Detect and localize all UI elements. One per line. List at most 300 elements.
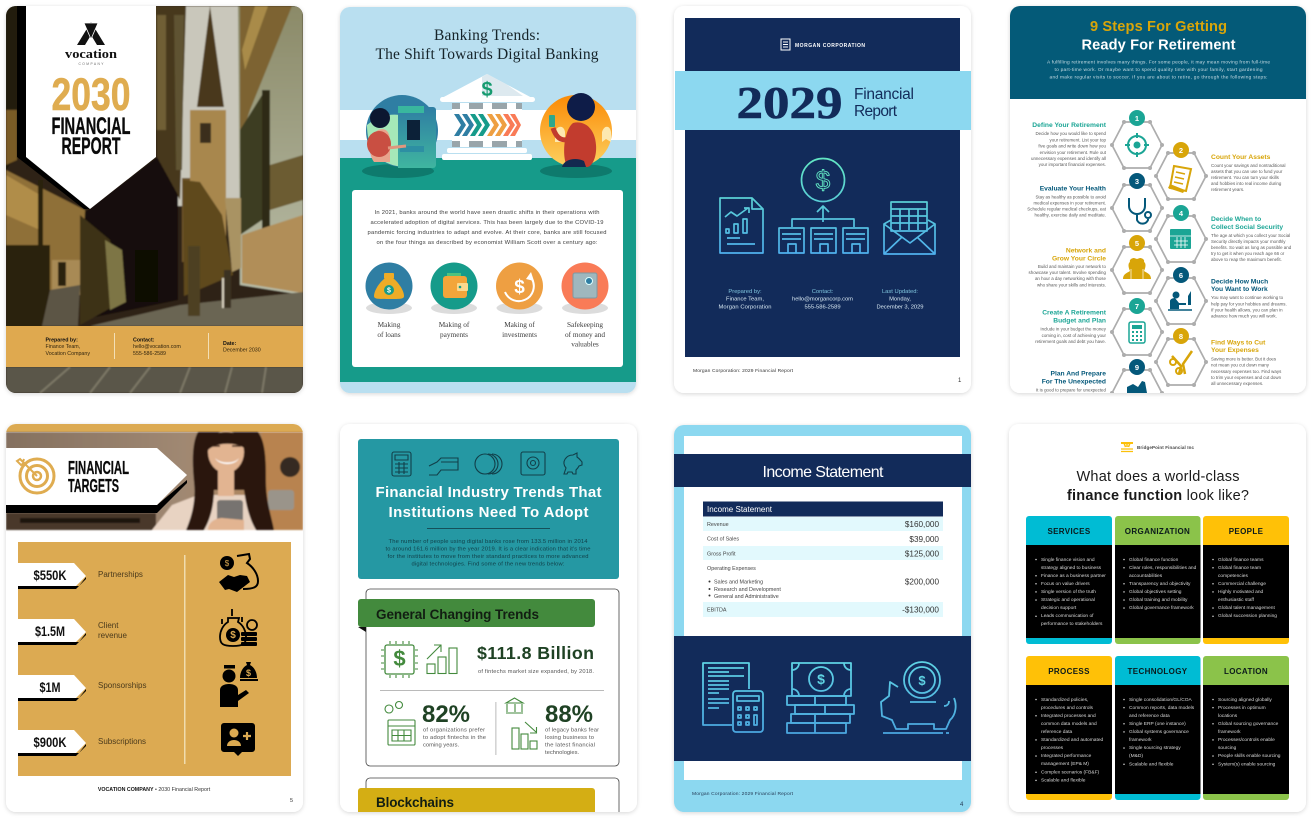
table: income statement: EBITDA bbox=[707, 608, 727, 614]
step 7 text: Include in your budget the money bbox=[1040, 326, 1107, 332]
target row: subscriptions bbox=[18, 730, 146, 756]
step 8 text: Your Expenses bbox=[1211, 347, 1259, 354]
report details: 555-586-2589 bbox=[804, 304, 841, 310]
number badges: 3 bbox=[1135, 177, 1139, 186]
year 2030: 2030 bbox=[52, 69, 130, 120]
step 6 text: You Want to Work bbox=[1211, 286, 1268, 293]
stat: 88% bbox=[545, 701, 599, 756]
hexagon chain bbox=[1112, 122, 1206, 416]
icon: money bag, making of loans bbox=[366, 262, 412, 314]
step icons bbox=[1123, 133, 1192, 393]
target row: sponsorships: $1M bbox=[40, 679, 60, 695]
target row: client revenue bbox=[18, 619, 127, 645]
band: title 2029 financial report bbox=[675, 71, 971, 130]
labels: four things banks do: of money and bbox=[565, 330, 605, 339]
title: What does a world-class bbox=[1076, 469, 1240, 485]
black ribbon shadow bbox=[17, 6, 90, 209]
step 2 text: Count your savings and nontraditional bbox=[1211, 163, 1286, 168]
number badges bbox=[1129, 110, 1189, 375]
step 6 text bbox=[1211, 278, 1287, 318]
table: income statement: $160,000 bbox=[905, 520, 939, 529]
target row: partnerships bbox=[18, 563, 143, 589]
column: services: decision support bbox=[1041, 605, 1077, 611]
panel: banking trends bbox=[340, 7, 636, 393]
column: services: Single version of the truth bbox=[1041, 589, 1096, 595]
intro paragraph: In 2021, banks around the world have seen drastic shifts in their operations with bbox=[374, 210, 600, 216]
step 6 text: help pay for your hobbies and dreams. bbox=[1211, 302, 1287, 306]
band: finance icons bbox=[674, 636, 971, 761]
column: people: PEOPLE bbox=[1229, 527, 1264, 536]
step 8 text bbox=[1211, 340, 1282, 386]
illustration: bank building with chevrons bbox=[440, 74, 535, 160]
step 4 text bbox=[1211, 216, 1292, 262]
report details: Last Updated: bbox=[882, 289, 918, 295]
column: organization: Global objectives setting bbox=[1129, 589, 1182, 595]
column: organization bbox=[1115, 516, 1200, 644]
intro paragraph: digital technologies. Find some of the new trends below: bbox=[412, 562, 565, 568]
banner: financial targets heading: TARGETS bbox=[68, 476, 119, 496]
icon: dollar return, making of investments: $ bbox=[514, 277, 525, 298]
column: services: Strategic and operational bbox=[1041, 597, 1095, 603]
target row: client revenue: Client bbox=[98, 621, 119, 630]
table: income statement: Gross Profit bbox=[707, 552, 736, 558]
column: people: Global finance team bbox=[1218, 565, 1261, 571]
footer: page label bbox=[692, 791, 964, 808]
intro paragraph: pandemic forcing industries to adapt and evolve. At their core, banks are still focused bbox=[368, 230, 606, 236]
footer band: contact details: Contact: bbox=[133, 338, 155, 344]
target row: sponsorships: Sponsorships bbox=[98, 681, 146, 690]
header band bbox=[1010, 6, 1306, 99]
step 7 text: retirement goals and debt you have. bbox=[1035, 339, 1106, 344]
step 3 text: medical expenses in your retirement. bbox=[1033, 200, 1106, 206]
column: location: Sourcing aligned globally bbox=[1218, 697, 1272, 703]
step 6 text: Decide How Much bbox=[1211, 278, 1268, 286]
title: finance function look like? bbox=[1067, 488, 1249, 504]
table: income statement: Research and Development bbox=[714, 587, 781, 593]
footer band: contact details: Finance Team, bbox=[46, 344, 80, 350]
footer band: contact details: Vocation Company bbox=[46, 351, 90, 357]
target row: client revenue: revenue bbox=[98, 631, 127, 640]
band: title 2029 financial report: 2029 bbox=[736, 77, 842, 128]
column: technology: Scalable and flexible bbox=[1129, 762, 1174, 768]
banner: financial targets heading: FINANCIAL bbox=[68, 458, 129, 478]
stat: $111.8 billion: $111.8 Billion bbox=[477, 643, 594, 663]
intro paragraph bbox=[386, 539, 590, 568]
logo: vocation company bbox=[65, 22, 117, 66]
column: organization: Global governance framework bbox=[1129, 605, 1194, 611]
table: income statement: $200,000 bbox=[905, 578, 939, 586]
number badges: 8 bbox=[1179, 332, 1183, 341]
panel: financial industry trends bbox=[340, 424, 637, 818]
footer: page label bbox=[693, 368, 962, 382]
intro paragraph: The number of people using digital banks rose from 133.5 million in 2014 bbox=[388, 539, 588, 545]
icon: dollar chip and rising bars: $ bbox=[393, 646, 406, 671]
logo: morgan corporation: MORGAN CORPORATION bbox=[795, 43, 865, 49]
header band: A fulfilling retirement involves many things. For some people, it may mean moving from full-time bbox=[1047, 60, 1270, 66]
icon: handshake and money bag: $ bbox=[225, 559, 230, 568]
illustration: person with phone bbox=[540, 93, 612, 178]
column: location: People skills enable sourcing bbox=[1218, 753, 1281, 759]
logo: morgan corporation bbox=[781, 39, 865, 50]
step 3 text: Evaluate Your Health bbox=[1040, 186, 1106, 192]
heading band: Income Statement bbox=[762, 464, 884, 481]
icon: money bag and coins: $ bbox=[230, 630, 236, 641]
icon: gears and calendar bbox=[385, 702, 415, 745]
heading band bbox=[674, 454, 971, 487]
column: location bbox=[1203, 656, 1289, 800]
icon: safe, safekeeping bbox=[562, 262, 608, 314]
step 7 text: coming in, cost of achieving your bbox=[1042, 333, 1107, 338]
panel: income statement bbox=[674, 425, 971, 812]
column: people: Commercial challenge bbox=[1218, 581, 1266, 587]
step 2 text: retirement years. bbox=[1211, 187, 1244, 192]
gold panel bbox=[18, 542, 291, 776]
footer band: contact details: Date: bbox=[223, 341, 236, 347]
step 7 text: Create A Retirement bbox=[1042, 310, 1107, 316]
band: title 2029 financial report: Report bbox=[854, 103, 898, 120]
column: services: SERVICES bbox=[1047, 527, 1091, 536]
table: income statement bbox=[703, 502, 943, 617]
column: technology: (M&D) bbox=[1129, 753, 1143, 759]
stat: 82%: coming years. bbox=[423, 742, 459, 748]
column: people: competencies bbox=[1218, 573, 1248, 579]
step 2 text: retirement. You can turn your skills bbox=[1211, 175, 1280, 180]
step 3 text: Stay as healthy as possible to avoid bbox=[1035, 194, 1107, 200]
step 2 text: assets that you can use to fund your bbox=[1211, 169, 1283, 174]
column: process: Integrated performance bbox=[1041, 753, 1092, 759]
icon: money bag and coins bbox=[220, 609, 257, 646]
icon: businessman with money bag: $ bbox=[246, 668, 251, 678]
step 7 text: Budget and Plan bbox=[1053, 318, 1106, 324]
stat: $111.8 billion: of fintechs market size expanded, by 2018. bbox=[478, 669, 594, 675]
step 5 text: Grow Your Circle bbox=[1052, 256, 1106, 262]
step 4 text: Security directly impacts your monthly bbox=[1211, 239, 1286, 244]
step 3 text: Schedule regular medical checkups, eat bbox=[1027, 206, 1107, 212]
number badges: 5 bbox=[1135, 239, 1139, 248]
header band: to part-time work. Or maybe want to spend quality time with your family, start gardening bbox=[1054, 67, 1263, 73]
header band: 9 Steps For Getting bbox=[1090, 19, 1227, 35]
intro paragraph: on the four things as described by economist William Scott over a century ago: bbox=[376, 240, 598, 246]
column: services: strategy aligned to business bbox=[1041, 565, 1102, 571]
target row: client revenue: $1.5M bbox=[35, 623, 65, 639]
column: people: Global talent management bbox=[1218, 605, 1275, 611]
labels: four things banks do bbox=[378, 322, 605, 346]
step 1 text: your retirement. List your top bbox=[1050, 138, 1107, 142]
column: technology: Single consolidation/GL/COA bbox=[1129, 697, 1193, 703]
footer: page label: Morgan Corporation: 2029 Financial Report bbox=[693, 368, 794, 374]
step 1 text: unnecessary expenses and identify all bbox=[1031, 156, 1106, 161]
column: organization: Transparency and objectivity bbox=[1129, 581, 1191, 587]
icon: banknote and stacked money: $ bbox=[817, 671, 825, 687]
section: blockchains: Blockchains bbox=[376, 795, 454, 810]
logo: bridgepoint financial: BridgePoint Financial Inc bbox=[1137, 445, 1194, 450]
step 3 text bbox=[1027, 186, 1107, 218]
footer band: contact details: hello@vocation.com bbox=[133, 344, 181, 350]
intro paragraph: for the institutes to move from their standard practices to more advanced bbox=[388, 554, 588, 560]
step 1 text: five goals and write down how you bbox=[1038, 144, 1107, 148]
column: organization: ORGANIZATION bbox=[1125, 527, 1190, 536]
stat: 88%: 88% bbox=[545, 701, 593, 728]
column: people: Global succession planning bbox=[1218, 613, 1277, 619]
step 8 text: not mean you cut down many bbox=[1211, 362, 1270, 368]
step 1 text bbox=[1031, 122, 1107, 167]
header box bbox=[358, 439, 619, 579]
footer: VOCATION COMPANY • 2030 Financial Report bbox=[98, 787, 211, 793]
column: services: Leads communication of bbox=[1041, 613, 1094, 619]
section: general changing trends: General Changing Trends bbox=[376, 607, 539, 622]
column: technology: Global systems governance bbox=[1129, 729, 1189, 735]
column: process: procedures and controls bbox=[1041, 705, 1094, 711]
stat: 88%: technologies. bbox=[545, 750, 580, 756]
column: organization: accountabilities bbox=[1129, 573, 1163, 579]
intro paragraph bbox=[368, 210, 606, 246]
logo: bridgepoint financial bbox=[1121, 443, 1194, 452]
icon: money bag, making of loans: $ bbox=[387, 288, 391, 294]
icon: document and calculator bbox=[703, 663, 763, 732]
icon: add user chat bubble bbox=[221, 723, 255, 756]
illustration: bank building with chevrons: $ bbox=[481, 79, 493, 101]
logo: vocation company: vocation bbox=[65, 47, 117, 61]
white ribbon banner bbox=[26, 6, 156, 209]
table: income statement: Income Statement bbox=[707, 505, 773, 514]
step 4 text: benefits. So wait as long as possible and bbox=[1211, 245, 1292, 250]
step 1 text: envision your retirement. Rule out bbox=[1040, 150, 1107, 155]
number badges: 1 bbox=[1135, 114, 1139, 123]
step 5 text: an hour a day networking with those bbox=[1035, 276, 1107, 281]
column: technology: Single ERP (one instance) bbox=[1129, 721, 1186, 727]
target row: subscriptions: Subscriptions bbox=[98, 737, 146, 746]
step 4 text: above to reap the maximum benefit. bbox=[1211, 257, 1282, 262]
step 9 text: For The Unexpected bbox=[1042, 378, 1106, 386]
labels: four things banks do: investments bbox=[502, 330, 537, 339]
column: technology: Common reports, data models bbox=[1129, 705, 1195, 711]
labels: four things banks do: of loans bbox=[377, 330, 401, 339]
panel: 2029 financial report cover bbox=[674, 6, 971, 393]
footer: page label: Morgan Corporation: 2029 Financial Report bbox=[692, 791, 794, 797]
heading: Institutions Need To Adopt bbox=[388, 504, 588, 521]
icon: report document bbox=[720, 198, 763, 253]
icon: piggy bank with coin bbox=[881, 662, 956, 733]
step 6 text: If your health allows, you can plan in bbox=[1211, 308, 1283, 312]
stat: 88%: losing business to bbox=[545, 735, 594, 741]
icon: dollar return, making of investments bbox=[496, 262, 543, 314]
column: technology: TECHNOLOGY bbox=[1128, 667, 1188, 676]
step 8 text: Saving more is better. But it does bbox=[1211, 356, 1277, 362]
heading: financial report: REPORT bbox=[62, 133, 121, 160]
column: process: Standardized and automated bbox=[1041, 737, 1104, 743]
report details: Monday, bbox=[889, 296, 911, 302]
panel: world-class finance function bbox=[1009, 424, 1306, 812]
number badges: 9 bbox=[1135, 363, 1139, 372]
icon: businessman with money bag bbox=[220, 662, 258, 707]
table: income statement: -$130,000 bbox=[902, 606, 939, 614]
column: location: Processes/controls enable bbox=[1218, 737, 1275, 743]
icon: dollar coin over organisation: $ bbox=[816, 165, 831, 195]
step 9 text: It is good to prepare for unexpected bbox=[1036, 388, 1107, 392]
step 4 text: Collect Social Security bbox=[1211, 224, 1283, 231]
column: process: management (EP& M) bbox=[1041, 761, 1089, 767]
step 8 text: all unnecessary expenses. bbox=[1211, 381, 1263, 386]
section: general changing trends bbox=[358, 589, 619, 766]
icon: piggy bank with coin: $ bbox=[918, 673, 926, 688]
footer: 5 bbox=[290, 798, 293, 804]
column: location: Processes in optimum bbox=[1218, 705, 1266, 711]
number badges: 2 bbox=[1179, 146, 1183, 155]
table: income statement: $125,000 bbox=[905, 550, 939, 558]
column: process: reference data bbox=[1041, 729, 1073, 735]
step 4 text: The age at which you collect your Social bbox=[1211, 233, 1290, 238]
icon: wallet, making of payments bbox=[430, 262, 478, 314]
report details: December 3, 2029 bbox=[876, 304, 924, 310]
step 9 text: Plan And Prepare bbox=[1050, 370, 1106, 378]
target row: partnerships: Partnerships bbox=[98, 570, 143, 579]
stat: $111.8 billion bbox=[477, 643, 594, 675]
column: process: processes bbox=[1041, 745, 1064, 751]
labels: four things banks do: payments bbox=[440, 330, 468, 339]
column: location: framework bbox=[1218, 729, 1241, 735]
heading bbox=[376, 484, 602, 521]
step 9 text bbox=[1036, 370, 1107, 392]
step 8 text: to trim your expenses and cut down bbox=[1211, 375, 1282, 380]
column: services: Single finance vision and bbox=[1041, 557, 1095, 563]
logo: vocation company: COMPANY bbox=[78, 62, 104, 66]
heading: financial report bbox=[52, 117, 130, 154]
column: location: Global sourcing governance bbox=[1218, 721, 1279, 727]
column: technology: Single sourcing strategy bbox=[1129, 745, 1181, 751]
report details: Contact: bbox=[812, 289, 834, 295]
column: services: Focus on value drivers bbox=[1041, 581, 1090, 587]
labels: four things banks do: Making of bbox=[439, 320, 470, 329]
title: The Shift Towards Digital Banking bbox=[376, 46, 599, 63]
column: process: Integrated processes and bbox=[1041, 713, 1096, 719]
header icons: calculator, card, coins, safe, piggy bank bbox=[392, 452, 582, 476]
column: process: PROCESS bbox=[1048, 667, 1090, 676]
panel: financial targets bbox=[6, 424, 303, 812]
labels: four things banks do: Safekeeping bbox=[567, 320, 603, 329]
report details: Prepared by: bbox=[728, 289, 762, 295]
column: location: System(s) enable sourcing bbox=[1218, 762, 1276, 768]
column: people: Highly motivated and bbox=[1218, 589, 1264, 595]
header band: Ready For Retirement bbox=[1082, 38, 1236, 54]
step 4 text: try to get it when you reach age 66 or bbox=[1211, 251, 1285, 256]
step 4 text: Decide When to bbox=[1211, 216, 1261, 223]
icon: dollar coin over organisation bbox=[779, 158, 868, 253]
column: process: Complex scenarios (FB&F) bbox=[1041, 770, 1100, 776]
table: income statement: Cost of Sales bbox=[707, 536, 739, 542]
report details: Finance Team, bbox=[726, 296, 764, 302]
panel: 9 steps for getting ready for retirement bbox=[1010, 6, 1306, 416]
column: people bbox=[1203, 516, 1289, 644]
number badges: 6 bbox=[1179, 271, 1183, 280]
stat: 82%: 82% bbox=[422, 701, 470, 728]
column: process: Standardized policies, bbox=[1041, 697, 1088, 703]
text panel bbox=[352, 190, 623, 367]
step 6 text: advance how much you will work. bbox=[1211, 314, 1277, 318]
step 5 text: Network and bbox=[1066, 248, 1106, 254]
heading: Financial Industry Trends That bbox=[376, 484, 602, 501]
step 5 text: Build and maintain your network to bbox=[1038, 264, 1107, 269]
number badges: 7 bbox=[1135, 302, 1139, 311]
banner: financial targets heading bbox=[6, 448, 187, 513]
header band: and make regular visits to soccer. If you are about to retire, go through the following steps: bbox=[1050, 74, 1268, 80]
footer: page label: 4 bbox=[960, 802, 964, 808]
step 8 text: Find Ways to Cut bbox=[1211, 340, 1266, 346]
labels: four things banks do: Making bbox=[378, 320, 401, 329]
target row: subscriptions: $900K bbox=[34, 734, 66, 750]
band: title 2029 financial report: Financial bbox=[854, 86, 914, 103]
report details: Morgan Corporation bbox=[718, 304, 772, 310]
column: services: Finance as a business partner bbox=[1041, 573, 1106, 579]
column: technology: and reference data bbox=[1129, 713, 1170, 719]
column: process: Scalable and flexible bbox=[1041, 778, 1086, 784]
stat: 82% bbox=[422, 701, 486, 748]
step 1 text: your important financial expenses. bbox=[1039, 162, 1106, 167]
stat: 82%: of organizations prefer bbox=[423, 728, 485, 734]
column: people: Global finance teams bbox=[1218, 557, 1264, 563]
step 7 text bbox=[1035, 310, 1107, 344]
photo: city street with church tower bbox=[6, 6, 303, 393]
section: blockchains bbox=[358, 778, 619, 818]
column: organization: Clear roles, responsibilities and bbox=[1129, 565, 1197, 571]
title: Banking Trends: bbox=[434, 27, 540, 44]
column: services: performance to stakeholders bbox=[1041, 621, 1103, 627]
step 5 text: showcase your talent. Involve spending bbox=[1029, 270, 1107, 275]
footer band: contact details: 555-586-2589 bbox=[133, 351, 166, 357]
column: technology: framework bbox=[1129, 737, 1152, 743]
step 8 text: necessary expenses too. Find ways bbox=[1211, 369, 1282, 374]
illustration: person at ATM bbox=[362, 95, 438, 178]
icon: envelope with spreadsheet bbox=[884, 202, 935, 254]
step 3 text: healthy, exercise daily and meditate. bbox=[1035, 212, 1106, 218]
stat: 88%: the latest financial bbox=[545, 742, 595, 748]
intro paragraph: accelerated adoption of digital services. This has been largely due to the COVID-19 bbox=[370, 220, 604, 226]
step 6 text: You may want to continue working to bbox=[1211, 295, 1284, 300]
table: income statement: Operating Expenses bbox=[707, 566, 756, 572]
footer: page label: 1 bbox=[958, 378, 962, 384]
column: people: enthusiastic staff bbox=[1218, 597, 1255, 603]
column: technology bbox=[1115, 656, 1200, 800]
step 2 text: and hobbies into real income during bbox=[1211, 181, 1282, 186]
step 2 text: Count Your Assets bbox=[1211, 154, 1271, 161]
step 5 text bbox=[1029, 248, 1107, 288]
table: income statement: Revenue bbox=[707, 522, 729, 528]
step 2 text bbox=[1211, 154, 1286, 192]
column: location: LOCATION bbox=[1224, 667, 1268, 676]
target row: sponsorships bbox=[18, 675, 146, 701]
column: location: locations bbox=[1218, 713, 1238, 719]
stat: 88%: of legacy banks fear bbox=[545, 728, 599, 734]
table: income statement: $39,000 bbox=[909, 535, 939, 544]
report details bbox=[718, 289, 924, 310]
column: organization: Global training and mobility bbox=[1129, 597, 1188, 603]
target row: partnerships: $550K bbox=[34, 567, 66, 583]
number badges: 4 bbox=[1179, 209, 1184, 218]
heading: financial report: FINANCIAL bbox=[52, 113, 130, 140]
photo: woman with phone bbox=[6, 431, 303, 530]
table: income statement: General and Administrative bbox=[714, 594, 779, 600]
table: income statement: Sales and Marketing bbox=[714, 580, 763, 586]
footer band: contact details bbox=[6, 326, 303, 367]
column: services bbox=[1026, 516, 1112, 644]
column: process: common data models and bbox=[1041, 721, 1097, 727]
step 5 text: who share your skills and interests. bbox=[1037, 282, 1106, 288]
report details: hello@morgancorp.com bbox=[792, 296, 853, 302]
footer bbox=[98, 787, 293, 804]
step 1 text: Define Your Retirement bbox=[1032, 122, 1107, 129]
step 1 text: Decide how you would like to spend bbox=[1035, 131, 1107, 136]
column: process bbox=[1026, 656, 1112, 800]
icon: bank and falling bars bbox=[506, 698, 537, 749]
